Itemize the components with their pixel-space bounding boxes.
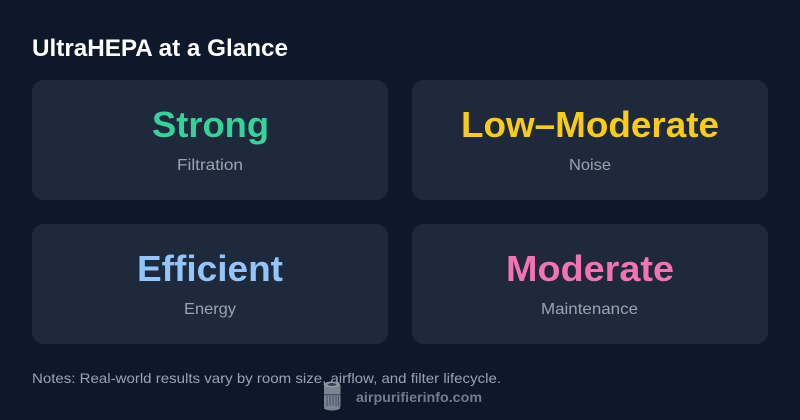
panel: maintenance — [412, 224, 768, 344]
value: efficient: Efficient — [137, 248, 283, 289]
label: filtration: Filtration — [177, 157, 243, 174]
watermark: airpurifierinfo.com — [356, 389, 482, 405]
icon: air filter cylinder — [324, 382, 340, 410]
panel: energy — [32, 224, 388, 344]
value: moderate: Moderate — [506, 248, 674, 289]
notes: Notes: Real-world results vary by room size, airflow, and filter lifecycle. — [32, 370, 501, 386]
label: energy: Energy — [184, 301, 236, 318]
panel: filtration — [32, 80, 388, 200]
value: strong: Strong — [152, 104, 269, 145]
panel: noise — [412, 80, 768, 200]
title: UltraHEPA at a Glance — [32, 35, 288, 62]
label: noise: Noise — [569, 157, 611, 174]
label: maintenance: Maintenance — [541, 301, 638, 318]
value: low-moderate: Low–Moderate — [461, 104, 719, 145]
